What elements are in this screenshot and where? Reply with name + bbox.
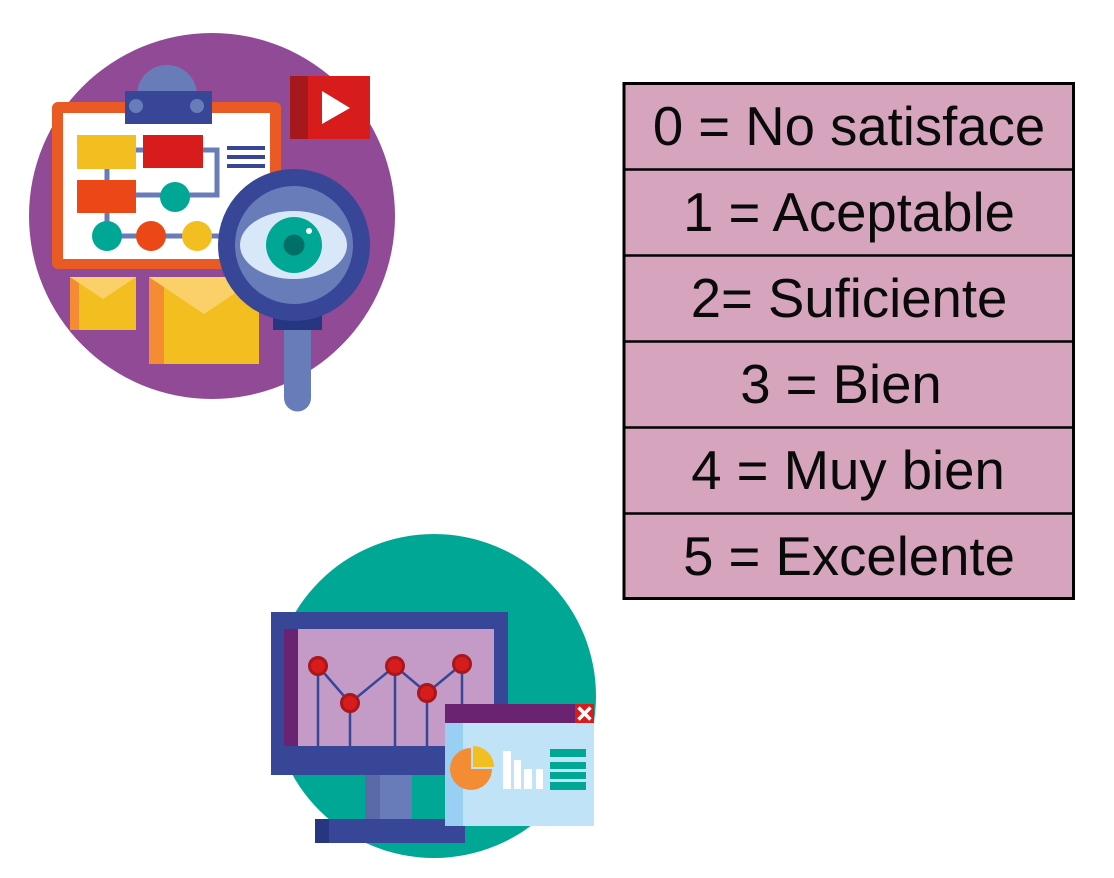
- rating 1: 1 = Aceptable: [683, 182, 1015, 243]
- flowchart connectors: [107, 150, 225, 236]
- flowchart yellow box: [77, 135, 136, 169]
- clipboard clip: [125, 91, 212, 124]
- list rows: [550, 749, 586, 790]
- popup window: [445, 704, 594, 826]
- text lines: [227, 146, 265, 168]
- line chart: [310, 656, 470, 746]
- monitor stand: [365, 775, 412, 819]
- rating 2: 2= Suficiente: [691, 268, 1007, 329]
- clipboard dome: [137, 65, 197, 125]
- flowchart red box: [143, 135, 203, 168]
- bar chart: [503, 751, 543, 789]
- monitor screen: [284, 629, 494, 746]
- monitor base: [315, 819, 465, 843]
- table background: [624, 84, 1074, 598]
- rating 0: 0 = No satisface: [653, 96, 1045, 157]
- icon: large envelope: [149, 277, 259, 364]
- magnifying glass handle: [284, 325, 311, 412]
- rating 3: 3 = Bien: [740, 354, 942, 415]
- teal background circle: [272, 534, 596, 858]
- magnifying glass lens: [218, 169, 370, 321]
- magnifying glass neck: [273, 305, 322, 330]
- rating scale table: [624, 84, 1074, 598]
- clipboard board: [52, 102, 281, 269]
- icon: monitor with charts: [271, 534, 596, 858]
- rating 5: 5 = Excelente: [683, 526, 1015, 587]
- icon: flowchart under magnifying glass: [29, 33, 395, 412]
- flowchart nodes: [92, 182, 212, 251]
- close button: [575, 704, 594, 723]
- rating 4: 4 = Muy bien: [691, 440, 1005, 501]
- monitor frame: [271, 612, 508, 775]
- icon: small envelope: [70, 277, 136, 330]
- icon: video play button: [290, 76, 370, 139]
- eye: [240, 211, 347, 279]
- purple background circle: [29, 33, 395, 399]
- flowchart orange box: [77, 180, 136, 213]
- pie chart: [450, 746, 494, 790]
